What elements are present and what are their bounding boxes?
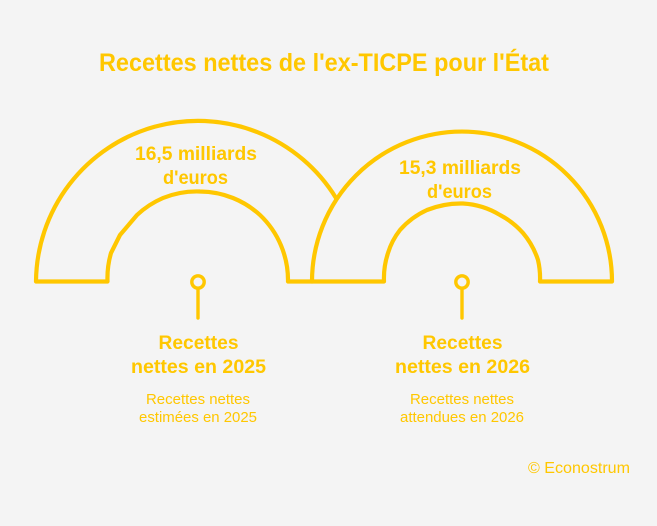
chart: semi-circular arches: [36, 121, 612, 281]
marker pin: 2025: [192, 276, 204, 318]
description: 2025: Recettes nettes: [146, 391, 250, 408]
source credit: © Econostrum: [528, 460, 630, 477]
description: 2026: attendues en 2026: [400, 409, 524, 426]
value label: 2025: d'euros: [163, 168, 228, 189]
heading: 2026: nettes en 2026: [395, 357, 530, 378]
arch: 2026: [312, 132, 612, 282]
value label: 2026: 15,3 milliards: [399, 158, 521, 179]
arch: 2025: [36, 121, 336, 281]
value label: 2025: [135, 144, 257, 189]
description: 2025: estimées en 2025: [139, 409, 257, 426]
heading: 2026: Recettes: [422, 333, 502, 354]
value label: 2025: 16,5 milliards: [135, 144, 257, 165]
value label: 2026: d'euros: [427, 182, 492, 203]
heading: 2025: nettes en 2025: [131, 357, 266, 378]
heading: 2026: [395, 333, 530, 378]
title: Recettes nettes de l'ex-TICPE pour l'État: [99, 48, 550, 77]
heading: 2025: [131, 333, 266, 378]
value label: 2026: [399, 158, 521, 203]
marker pin: 2026: [456, 276, 468, 318]
description: 2026: [400, 391, 524, 426]
heading: 2025: Recettes: [158, 333, 238, 354]
description: 2026: Recettes nettes: [410, 391, 514, 408]
description: 2025: [139, 391, 257, 426]
